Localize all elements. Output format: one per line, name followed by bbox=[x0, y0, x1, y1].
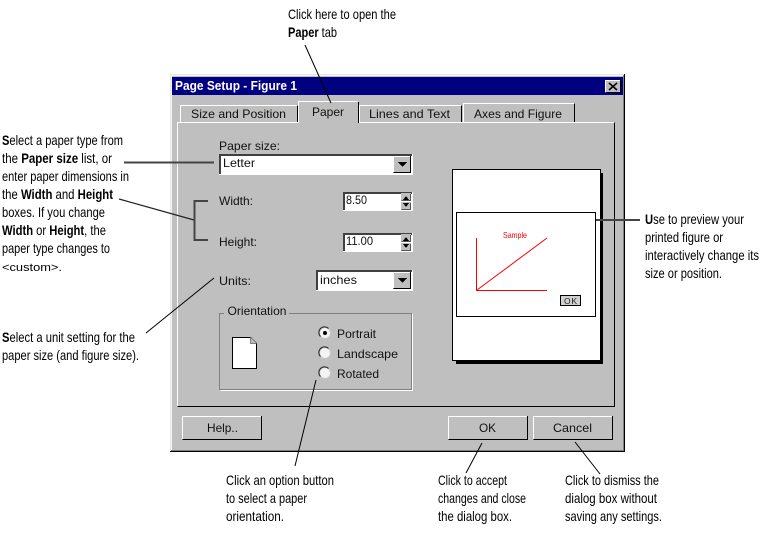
callout: OK: changes and close bbox=[438, 490, 526, 506]
dropdown: units bbox=[316, 270, 412, 290]
callout: OK: the dialog box. bbox=[438, 508, 512, 524]
callout: Cancel: dialog box without bbox=[565, 490, 657, 506]
callout: paper type: the Paper size list, or bbox=[2, 150, 112, 166]
label: Height: Height: bbox=[219, 235, 257, 249]
sample chart: Sample bbox=[503, 230, 527, 240]
arrow: OK button bbox=[466, 443, 482, 473]
label: Paper size: Paper size: bbox=[219, 139, 280, 153]
spinner bbox=[401, 234, 411, 251]
tab: Size and Position bbox=[180, 106, 298, 122]
callout: option button bbox=[226, 472, 334, 524]
arrow: paper size bbox=[124, 162, 214, 164]
input: width: 8.50 bbox=[346, 193, 367, 207]
icon: close button bbox=[605, 80, 621, 93]
tab: Axes and Figure bbox=[464, 104, 574, 122]
callout: paper type: Width or Height, the bbox=[2, 222, 106, 238]
radio: landscape: Landscape bbox=[337, 347, 398, 361]
tab: Lines and Text bbox=[360, 106, 462, 122]
tab panel bbox=[178, 122, 614, 406]
group box: orientation: Orientation bbox=[228, 304, 286, 318]
callout: paper tab: Paper tab bbox=[288, 24, 337, 40]
callout: OK: Click to accept bbox=[438, 472, 507, 488]
arrow: width and height bracket bbox=[119, 199, 208, 240]
arrow: preview bbox=[596, 219, 640, 221]
callout: preview: printed figure or bbox=[645, 229, 723, 245]
icon: page bbox=[232, 338, 256, 368]
callout: Cancel: saving any settings. bbox=[565, 508, 662, 524]
callout: paper type: paper type changes to bbox=[2, 240, 110, 256]
group box: orientation bbox=[220, 304, 413, 391]
radio: rotated: Rotated bbox=[337, 367, 379, 381]
callout: option button: Click an option button bbox=[226, 472, 334, 488]
callout: paper type: boxes. If you change bbox=[2, 204, 105, 220]
dropdown: paper size bbox=[220, 154, 412, 174]
radio: portrait bbox=[319, 327, 377, 341]
label: Units: Units: bbox=[219, 274, 251, 288]
button: Cancel: Cancel bbox=[553, 421, 592, 435]
arrow: Cancel button bbox=[575, 442, 600, 474]
callout: paper type: <custom>. bbox=[2, 262, 62, 274]
tab: Size and Position: Size and Position bbox=[191, 107, 286, 121]
callout: paper tab bbox=[288, 6, 396, 40]
dialog window bbox=[170, 74, 625, 452]
tab: Paper (active) bbox=[298, 102, 358, 124]
arrow: units bbox=[146, 278, 214, 333]
callout: option button: orientation. bbox=[226, 508, 284, 524]
title bar: Page Setup - Figure 1 bbox=[175, 79, 297, 93]
callout: preview: size or position. bbox=[645, 265, 722, 281]
arrow: paper tab bbox=[305, 45, 331, 103]
tab: Lines and Text: Lines and Text bbox=[369, 107, 451, 121]
button: Help: Help.. bbox=[207, 421, 238, 435]
callout: paper tab: Click here to open the bbox=[288, 6, 396, 22]
label: Width: Width: bbox=[219, 194, 253, 208]
callout: paper type: enter paper dimensions in bbox=[2, 168, 129, 184]
dropdown: units: inches bbox=[320, 273, 357, 287]
tab: Axes and Figure: Axes and Figure bbox=[474, 107, 562, 121]
paper preview bbox=[452, 170, 603, 364]
input: height bbox=[344, 234, 412, 252]
callout: preview: Use to preview your bbox=[645, 211, 744, 227]
radio: rotated bbox=[319, 367, 379, 381]
callout: unit setting bbox=[2, 329, 139, 363]
callout: Cancel bbox=[565, 472, 662, 524]
dropdown: paper size: Letter bbox=[223, 156, 255, 170]
callout: OK bbox=[438, 472, 526, 524]
tab: Paper (active): Paper bbox=[312, 105, 344, 119]
callout: paper type bbox=[2, 132, 129, 274]
callout: paper type: the Width and Height bbox=[2, 186, 113, 202]
arrow: rotated option bbox=[295, 380, 316, 466]
radio: portrait: Portrait bbox=[337, 327, 377, 341]
callout: Cancel: Click to dismiss the bbox=[565, 472, 659, 488]
callout: unit setting: Select a unit setting for the bbox=[2, 329, 135, 345]
button: OK: OK bbox=[479, 421, 496, 435]
button: Cancel bbox=[534, 416, 612, 440]
callout: unit setting: paper size (and figure size). bbox=[2, 347, 139, 363]
input: width bbox=[344, 192, 412, 210]
callout: paper type: Select a paper type from bbox=[2, 132, 123, 148]
spinner bbox=[401, 193, 411, 210]
button: Help bbox=[182, 416, 262, 440]
title bar bbox=[172, 77, 623, 95]
input: height: 11.00 bbox=[346, 234, 373, 248]
callout: option button: to select a paper bbox=[226, 490, 307, 506]
figure preview bbox=[456, 212, 596, 316]
button: OK bbox=[448, 416, 528, 440]
preview OK button: OK bbox=[564, 296, 577, 306]
callout: preview bbox=[645, 211, 759, 281]
